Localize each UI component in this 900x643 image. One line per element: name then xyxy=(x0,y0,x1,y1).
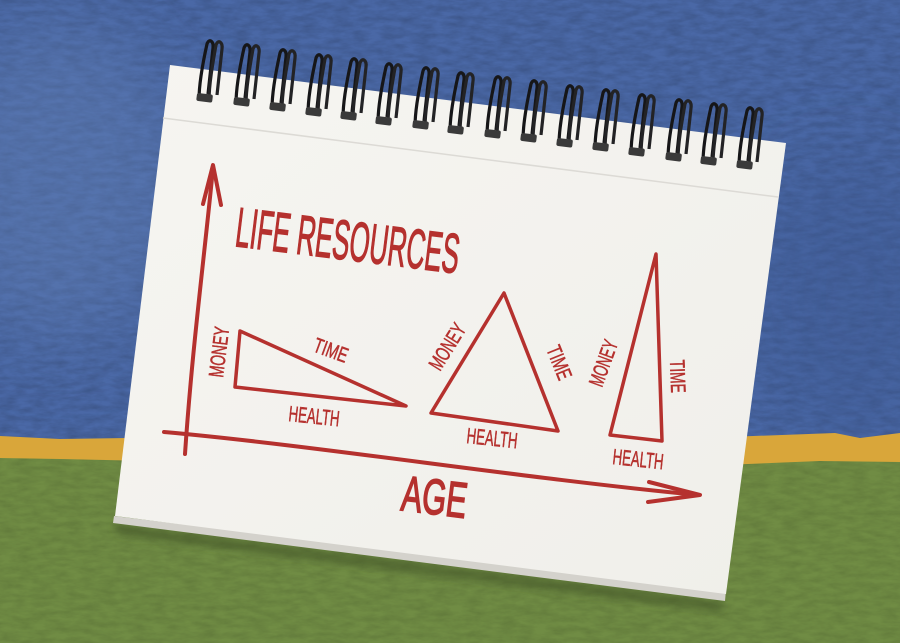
label: time: TIME xyxy=(542,342,576,383)
label: health: HEALTH xyxy=(287,402,341,431)
label: money: MONEY xyxy=(424,319,471,375)
notebook lower pages xyxy=(113,516,726,601)
spiral binding xyxy=(196,41,762,170)
label: money: MONEY xyxy=(584,336,623,390)
label: time: TIME xyxy=(310,334,351,367)
title: LIFE RESOURCES xyxy=(232,198,463,286)
notebook page xyxy=(115,65,786,594)
vertical axis arrow xyxy=(185,165,221,454)
background: blue handmade paper xyxy=(0,0,900,450)
triangle: old age xyxy=(584,254,690,474)
horizontal axis arrow: age xyxy=(164,432,700,502)
triangle: middle age xyxy=(424,293,576,453)
notebook shadow xyxy=(113,524,724,612)
label: health: HEALTH xyxy=(611,445,665,474)
background: green handmade paper xyxy=(0,458,900,643)
binding strip fold xyxy=(163,118,778,197)
label: money: MONEY xyxy=(204,325,234,379)
axis label: age: AGE xyxy=(399,465,471,529)
label: health: HEALTH xyxy=(465,424,519,453)
label: time: TIME xyxy=(665,359,690,393)
triangle: young xyxy=(204,325,406,431)
background: yellow paper strip xyxy=(0,433,900,466)
